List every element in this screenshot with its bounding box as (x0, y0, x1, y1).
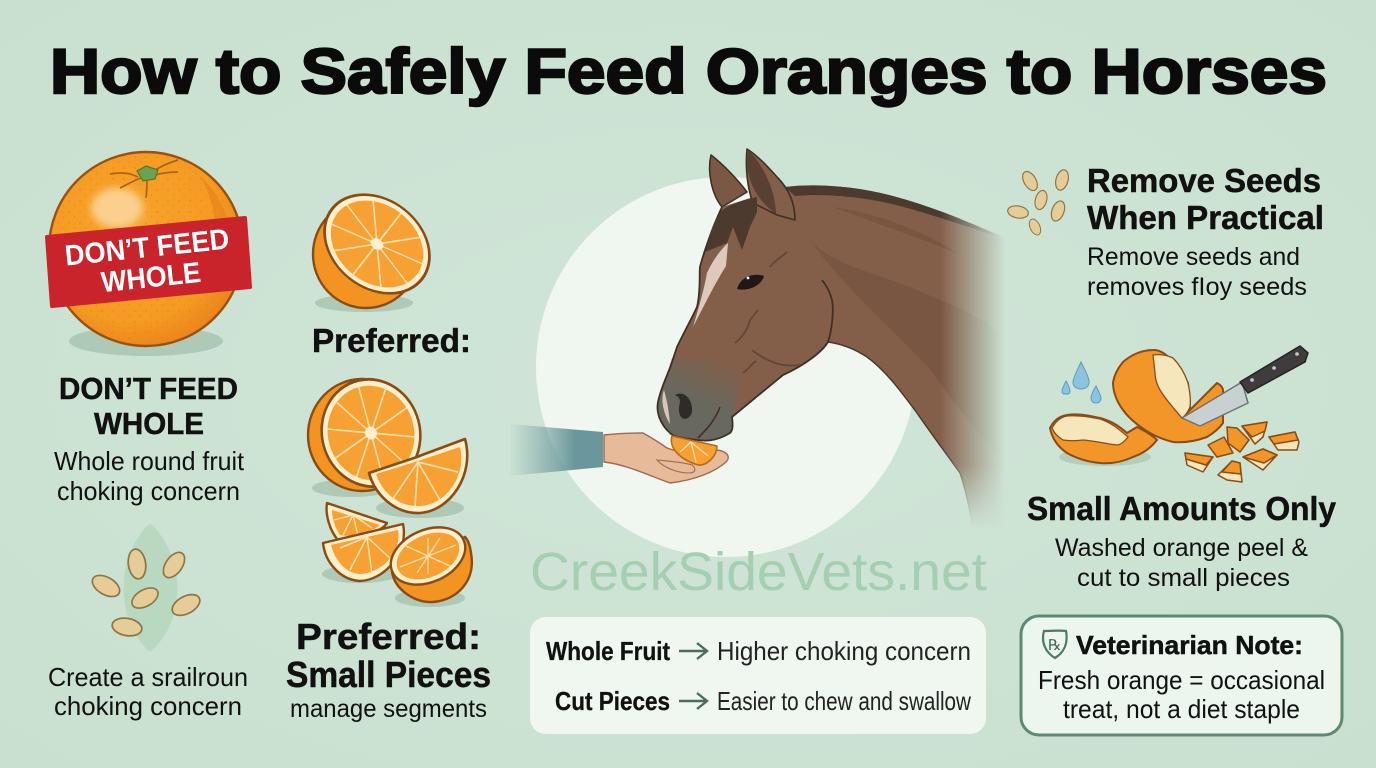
left peel strip (1050, 414, 1157, 463)
row: cut pieces: Cut Pieces (555, 686, 670, 716)
row: whole fruit: Higher choking concern (717, 636, 971, 666)
row: whole fruit (546, 636, 971, 666)
white backdrop circle (536, 177, 916, 557)
text: note body: treat, not a diet staple (1063, 694, 1300, 724)
muzzle (658, 358, 745, 441)
hand (604, 433, 728, 483)
water drops (1062, 362, 1101, 403)
title: How to Safely Feed Oranges to Horses (50, 37, 1327, 107)
heading: don't feed whole: DON’T FEED (59, 371, 238, 406)
text: remove seeds description: Remove seeds and (1087, 243, 1300, 271)
text: seeds description: Create a srailroun (48, 662, 248, 692)
head outline (658, 207, 833, 441)
illustration: horse being fed orange (510, 149, 1010, 557)
label: preferred: Preferred: (312, 322, 471, 359)
icon: whole orange with warning badge: DON’T FEED (63, 224, 231, 273)
mane crest (785, 185, 1000, 237)
inner ear (747, 149, 776, 214)
panel: remove seeds (1007, 162, 1324, 301)
thumb (657, 460, 695, 473)
peel spiral (1113, 350, 1223, 442)
text: small amounts description: Washed orange peel & (1055, 534, 1308, 562)
panel: veterinarian note (1021, 616, 1342, 735)
icon: stethoscope shield: ℞ (1048, 637, 1061, 654)
neck shading bands (812, 242, 957, 406)
forelock (705, 197, 757, 252)
icon: peel, knife and pieces (1050, 346, 1308, 482)
watermark: CreekSideVets.net (530, 542, 987, 602)
nostril (675, 394, 692, 419)
heading: small amounts only: Small Amounts Only (1027, 490, 1337, 527)
text: manage segments: manage segments (290, 695, 487, 723)
heading: remove seeds: Remove Seeds (1087, 162, 1321, 199)
text: small amounts description (1055, 534, 1308, 592)
mouth line (698, 407, 720, 438)
icon: orange slices and wedges (308, 368, 474, 607)
head and neck silhouette (658, 185, 1010, 530)
note box (1021, 616, 1342, 735)
heading: don't feed whole: WHOLE (94, 406, 204, 441)
panel: preferred small pieces (286, 174, 491, 723)
heading: remove seeds: When Practical (1087, 199, 1324, 236)
text: whole fruit description: Whole round fruit (54, 446, 245, 476)
text: small amounts description: cut to small pieces (1077, 564, 1290, 592)
text: remove seeds description: removes fIoy seeds (1087, 273, 1307, 301)
text: seeds description: choking concern (54, 691, 242, 721)
text: whole fruit description (54, 446, 245, 506)
orange slice in hand (671, 436, 717, 465)
sleeve (510, 424, 603, 476)
panel: seeds choking concern (48, 523, 248, 721)
back ear (710, 155, 747, 207)
row: cut pieces (555, 686, 971, 716)
horse head and neck (658, 155, 1010, 530)
icon: seeds on leaf (89, 523, 203, 652)
comparison box background (530, 617, 986, 734)
panel: don't feed whole (47, 152, 250, 506)
blaze (693, 243, 728, 327)
text: note body: Fresh orange = occasional (1038, 665, 1325, 695)
heading: preferred small pieces: Preferred: (296, 616, 481, 657)
knife (1182, 382, 1248, 426)
heading: remove seeds (1087, 162, 1324, 236)
row: whole fruit: Whole Fruit (546, 636, 670, 666)
text: seeds description (48, 662, 248, 721)
icon: halved orange (305, 174, 449, 314)
text: whole fruit description: choking concern (57, 476, 240, 506)
heading: preferred small pieces (286, 616, 491, 695)
jaw outline and neck underline (828, 342, 973, 530)
panel: small amounts only (1027, 346, 1337, 592)
icon: whole orange with warning badge: WHOLE (100, 257, 202, 299)
heading: preferred small pieces: Small Pieces (286, 654, 491, 695)
eye (737, 275, 764, 290)
front ear (746, 149, 795, 220)
row: cut pieces: Easier to chew and swallow (717, 686, 971, 716)
icon: seeds (1007, 168, 1070, 237)
heading: veterinarian note: Veterinarian Note: (1076, 630, 1303, 660)
cut pieces (1185, 422, 1299, 482)
nose highlight (662, 390, 670, 424)
panel: comparison box (530, 617, 986, 734)
text: note body (1038, 665, 1325, 724)
text: remove seeds description (1087, 243, 1307, 301)
face contour lines (735, 252, 800, 373)
icon: stethoscope shield (1043, 631, 1067, 658)
heading: don't feed whole (59, 371, 238, 441)
icon: whole orange with warning badge (47, 152, 250, 356)
